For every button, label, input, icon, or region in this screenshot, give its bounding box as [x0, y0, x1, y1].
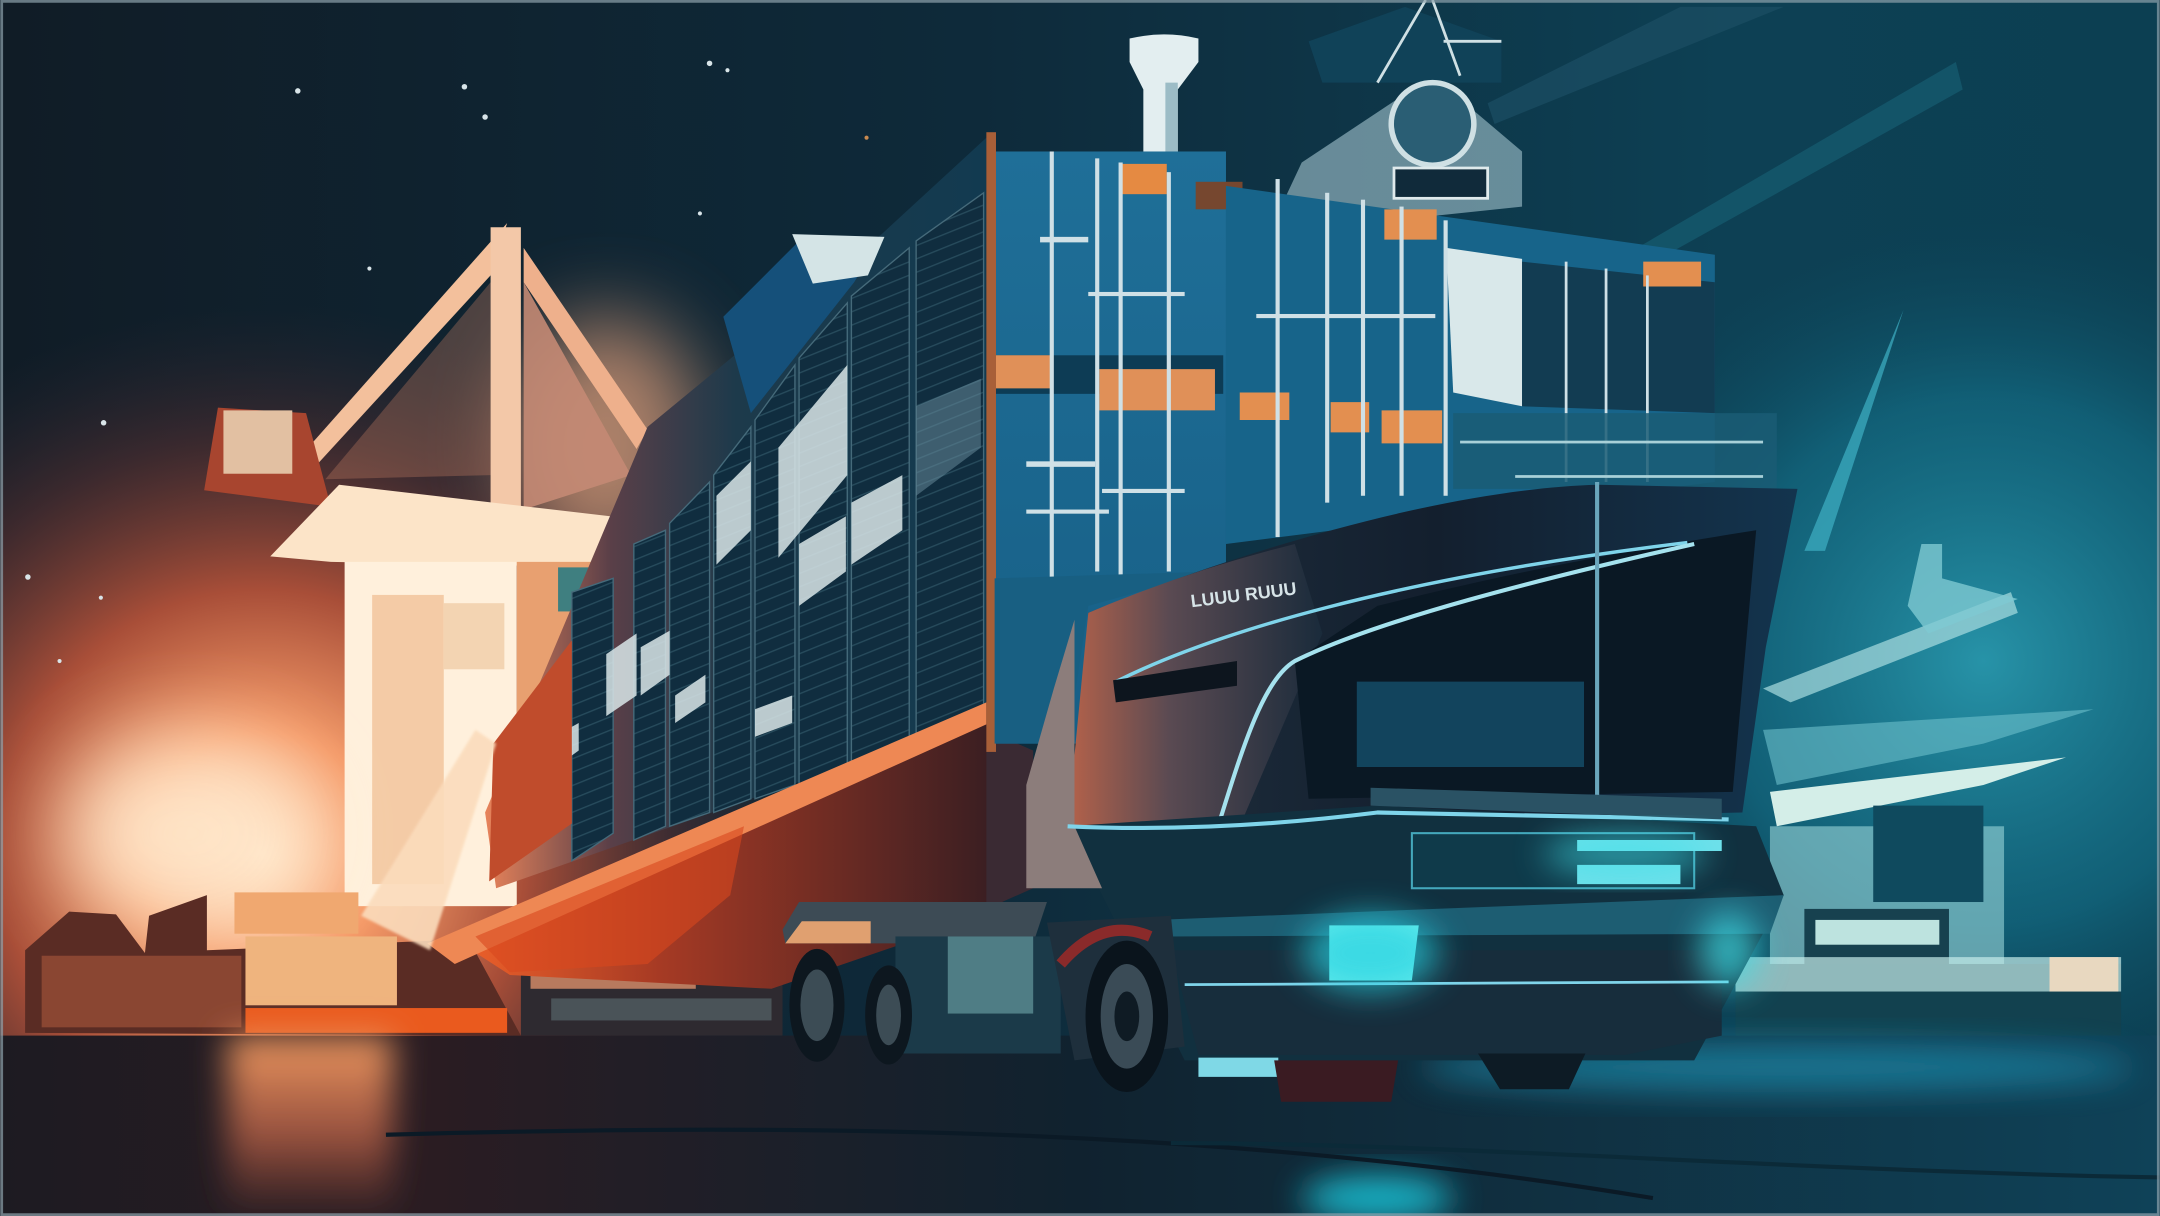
right teal port structures	[1736, 310, 2121, 1047]
bridge tower top right	[1281, 0, 1963, 255]
ship bow	[1068, 482, 1797, 854]
ship hull	[427, 702, 1040, 989]
stars	[25, 61, 869, 663]
upper container stack	[1226, 179, 1777, 544]
floor	[0, 1036, 2160, 1216]
left glow	[62, 737, 310, 930]
truck wheels	[789, 941, 1168, 1092]
container block front	[986, 132, 1243, 752]
crane at left	[204, 223, 648, 906]
ship name: LUUU RUUU	[1190, 578, 1298, 611]
funnel	[1130, 34, 1198, 168]
container wall side	[485, 138, 986, 888]
truck	[783, 620, 1784, 1102]
dock machinery left	[25, 892, 783, 1036]
white wave streaks at hull front	[361, 730, 496, 950]
